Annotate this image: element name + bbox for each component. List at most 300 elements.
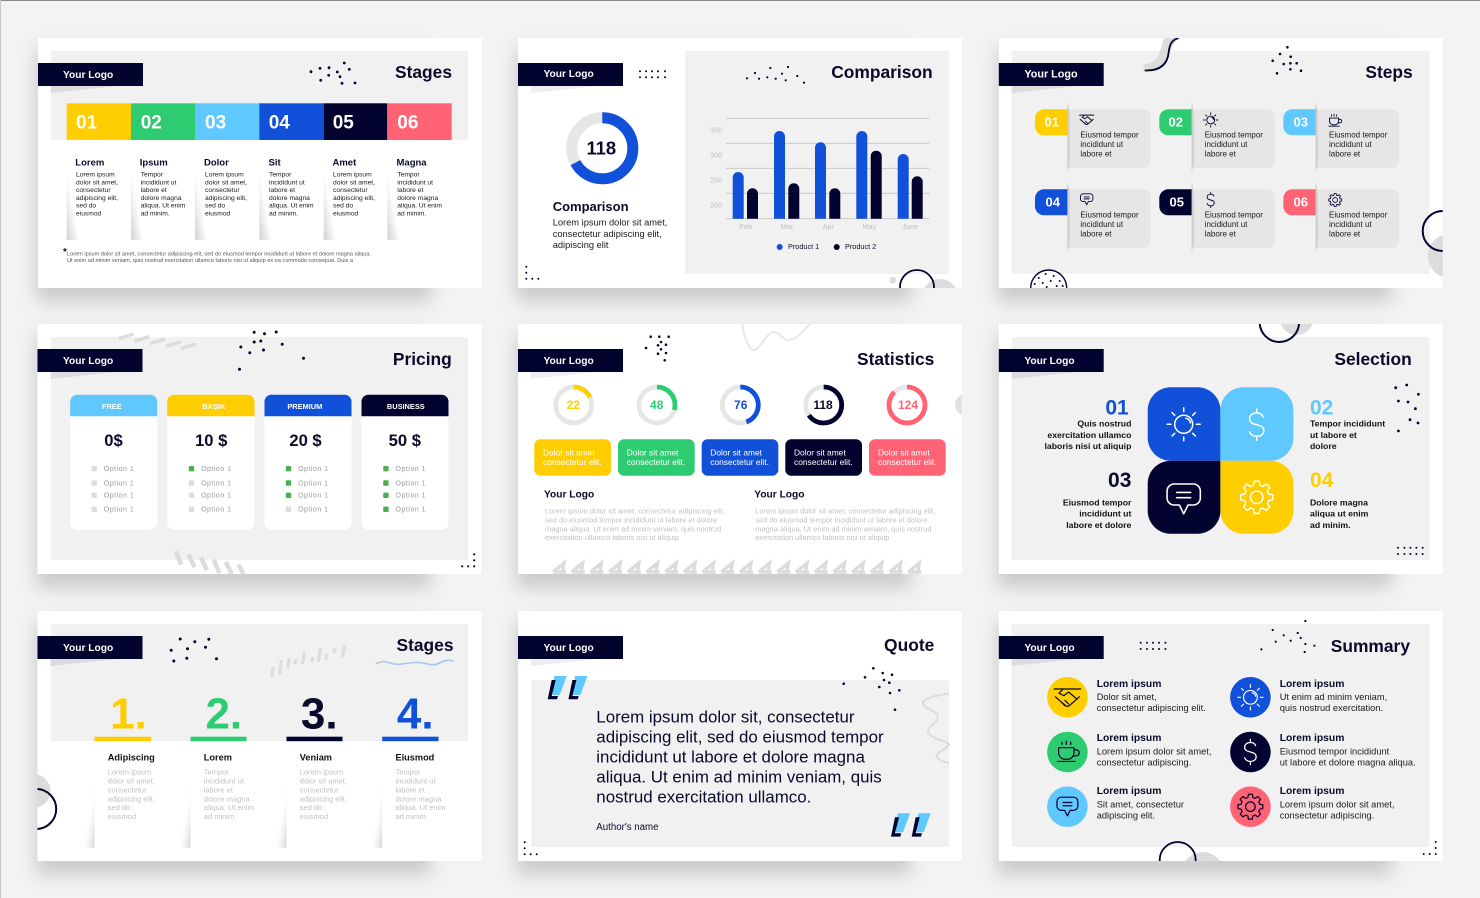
summary item: chat <box>1047 786 1184 827</box>
quote text: Lorem ipsum dolor sit, consectetur <box>596 707 855 726</box>
step 01: 01 <box>1044 115 1059 130</box>
pricing card: free: 0$ <box>104 431 123 450</box>
item 04 <box>1310 469 1369 530</box>
bar chart: 250 <box>710 176 722 185</box>
logo banner <box>999 349 1104 372</box>
stage 4: 4. <box>397 689 434 738</box>
step 06: incididunt ut <box>1329 220 1372 229</box>
text block right <box>754 490 935 542</box>
summary item: sun: Lorem ipsum <box>1280 679 1344 690</box>
step 03: incididunt ut <box>1329 140 1372 149</box>
pricing card: business: Option 1 <box>396 507 426 514</box>
item 01: Quis nostrud <box>1077 419 1131 429</box>
summary item: cup: Lorem ipsum <box>1097 733 1161 744</box>
summary item: gear: Lorem ipsum <box>1280 786 1344 797</box>
summary item: handshake: Lorem ipsum <box>1097 679 1161 690</box>
logo banner: Your Logo <box>544 69 594 80</box>
summary item: cup: consectetur adipiscing. <box>1097 757 1191 767</box>
panel: stages colour bars <box>38 38 482 288</box>
summary item: sun <box>1230 677 1387 718</box>
stage 4: Eiusmod <box>396 753 434 763</box>
stage 04: 04 <box>269 112 290 133</box>
stage 05: eiusmod <box>333 210 359 217</box>
label box: navy: Dolor sit amet <box>794 447 846 457</box>
stage 06: incididunt ut <box>397 179 433 186</box>
text block right: exercitation ullamco laboris nisi ut aliquip <box>755 533 889 542</box>
stage 1: Lorem ipsum <box>108 768 151 777</box>
stage 04: labore et <box>269 187 295 194</box>
stage 05: Lorem ipsum <box>333 172 372 179</box>
stage 03: Dolor <box>204 158 229 169</box>
pricing card: premium: Option 1 <box>298 466 329 473</box>
stage 01: eiusmod <box>76 210 102 217</box>
title with wave <box>376 635 454 665</box>
text block left: exercitation ullamco laboris nisi ut aliquip <box>545 533 679 542</box>
stage 01 <box>67 103 131 240</box>
petal: dollar <box>1220 387 1293 461</box>
summary item: gear: Lorem ipsum dolor sit amet, <box>1280 800 1394 810</box>
stage 01: adipiscing elit, <box>76 195 118 202</box>
pricing card: business: Option 1 <box>396 480 426 487</box>
pricing card: premium: PREMIUM <box>287 402 322 411</box>
bar chart: May <box>862 222 877 231</box>
summary item: handshake: consectetur adipiscing elit. <box>1097 703 1206 713</box>
step 06: labore et <box>1329 229 1361 238</box>
text block right: magna aliqua. Ut enim ad minim veniam, quis nostrud <box>755 524 932 533</box>
icon: closing quote marks <box>891 813 931 837</box>
item 01 <box>1045 397 1131 451</box>
stage 04: Sit <box>268 158 281 169</box>
step 03 <box>1283 102 1399 172</box>
stage 3: consectetur <box>300 785 339 794</box>
text block left: magna aliqua. Ut enim ad minim veniam, quis nostrud <box>545 524 721 533</box>
title with wave: Stages <box>396 635 454 655</box>
item 02: ut labore et <box>1310 430 1357 440</box>
panel: steps <box>998 38 1443 288</box>
item 04: 04 <box>1310 469 1334 492</box>
step 04: incididunt ut <box>1080 220 1124 229</box>
donut: 48 <box>639 387 675 423</box>
stage 1: Adipiscing <box>108 753 155 763</box>
bar chart: Feb <box>739 222 752 231</box>
donut: 76: 76 <box>734 398 748 412</box>
summary item: sun: Ut enim ad minim veniam, <box>1280 692 1387 702</box>
legend <box>776 244 876 250</box>
label box: green: Dolor sit amet <box>627 447 679 457</box>
pricing card: free: Option 1 <box>104 507 134 514</box>
footnote: * <box>63 247 67 258</box>
stage 3: Veniam <box>300 753 332 763</box>
footnote <box>63 248 371 263</box>
pricing card: business: Option 1 <box>396 466 426 473</box>
label box: blue: consectetur elit. <box>710 457 769 467</box>
text block right: Your Logo <box>754 490 804 500</box>
comparison text: consectetur adipiscing elit, <box>553 229 662 239</box>
item 03: incididunt ut <box>1079 509 1131 519</box>
label box: green <box>618 439 695 476</box>
stage 04: aliqua. Ut enim <box>269 203 314 210</box>
logo banner <box>999 63 1104 86</box>
title: Summary <box>1331 636 1410 656</box>
step 06: 06 <box>1293 195 1308 210</box>
icon: opening quote marks <box>548 676 587 699</box>
stage 4: ad minim. <box>396 812 428 821</box>
pricing card: premium: Option 1 <box>298 480 329 487</box>
logo banner: Your Logo <box>63 643 113 654</box>
stage 06: dolore magna <box>397 195 438 202</box>
stage 1 <box>70 689 155 848</box>
author: Author's name <box>596 822 658 833</box>
step 01: labore et <box>1080 149 1112 158</box>
panel: selection <box>999 301 1443 574</box>
stage 02: 02 <box>141 112 162 133</box>
label box: coral: Dolor sit amet <box>878 447 930 457</box>
bar chart: 200 <box>710 201 722 210</box>
label box: yellow: Dolor sit amet <box>543 447 595 457</box>
stage 02: incididunt ut <box>141 179 177 186</box>
step 02: 02 <box>1168 115 1183 130</box>
stage 3: Lorem ipsum <box>300 768 343 777</box>
logo banner <box>999 636 1104 659</box>
stage 05: Amet <box>332 158 357 169</box>
stage 2: Lorem <box>204 753 232 763</box>
pricing card: free: FREE <box>102 402 122 411</box>
pricing card: basik: Option 1 <box>201 480 232 487</box>
donut: 118 <box>572 118 633 179</box>
stage 3: adipiscing elit, <box>300 794 347 803</box>
step 04: 04 <box>1045 195 1061 210</box>
stage 03: Lorem ipsum <box>205 172 244 179</box>
donut: 22: 22 <box>567 398 580 412</box>
text block left: Your Logo <box>544 490 594 500</box>
item 02: 02 <box>1310 397 1333 420</box>
title: Pricing <box>393 349 452 369</box>
stage 3: dolor sit amet, <box>300 777 347 786</box>
stage 04: incididunt ut <box>269 179 305 186</box>
stage 06: aliqua. Ut enim <box>397 203 442 210</box>
footnote: Ut enim ad minim veniam, quis nostrud exercitation ullamco laboris nisi ut aliquip ex ea commodo consequat. Duis a <box>67 258 354 264</box>
item 04: ad minim. <box>1310 520 1351 530</box>
pricing card: free: Option 1 <box>104 466 134 473</box>
item 02: dolore <box>1310 441 1337 451</box>
pricing card: business: 50 $ <box>389 431 421 450</box>
summary item: handshake: Dolor sit amet, <box>1097 692 1157 702</box>
step 03: labore et <box>1329 149 1361 158</box>
summary item: cup: Lorem ipsum dolor sit amet, <box>1097 746 1211 756</box>
stage 06: labore et <box>397 187 423 194</box>
step 05: 05 <box>1169 195 1184 210</box>
donut: 48: 48 <box>650 398 664 412</box>
quote text: incididunt ut labore et dolore magna <box>596 747 865 766</box>
logo banner <box>38 63 143 86</box>
stage 03 <box>195 103 259 240</box>
donut: 118 <box>806 387 842 423</box>
pricing card: basik: BASIK <box>202 402 226 411</box>
step 05: labore et <box>1205 229 1237 238</box>
stage 03: adipiscing elit, <box>205 195 247 202</box>
pricing card: business <box>362 395 448 530</box>
item 04: aliqua ut enim <box>1310 509 1369 519</box>
donut: 118: 118 <box>586 137 616 158</box>
panel: numbered stages <box>16 611 481 861</box>
quote text: aliqua. Ut enim ad minim veniam, quis <box>596 767 882 786</box>
summary item: sun: quis nostrud exercitation. <box>1280 703 1383 713</box>
label box: yellow <box>534 439 611 476</box>
summary item: chat: Lorem ipsum <box>1097 786 1161 797</box>
summary item: chat: Sit amet, consectetur <box>1097 800 1184 810</box>
logo banner <box>38 349 142 372</box>
stage 03: sed do <box>205 203 225 210</box>
panel: comparison chart <box>518 38 962 315</box>
petal: chat <box>1148 461 1220 534</box>
logo banner: Your Logo <box>544 643 594 654</box>
pricing card: free: Option 1 <box>104 493 134 500</box>
donut: 22 <box>556 387 592 423</box>
stage 03: consectetur <box>205 187 240 194</box>
label box: yellow: consectetur elit. <box>543 457 602 467</box>
stage 03: dolor sit amet, <box>205 179 247 186</box>
stage 02: labore et <box>141 187 167 194</box>
bar chart: 350 <box>710 126 722 135</box>
summary item: dollar: Eiusmod tempor incididunt <box>1280 746 1390 756</box>
stage 3: eiusmod <box>300 812 328 821</box>
item 03: 03 <box>1108 469 1131 492</box>
stage 04: ad minim. <box>269 210 298 217</box>
step 05: Eiusmod tempor <box>1205 211 1263 220</box>
donut: 118: 118 <box>813 398 833 412</box>
stage 02: Tempor <box>141 172 164 179</box>
stage 06: ad minim. <box>397 210 426 217</box>
panel: summary <box>999 611 1443 894</box>
stage 03: 03 <box>205 112 226 133</box>
title: Comparison <box>831 62 933 82</box>
stage 1: eiusmod <box>108 812 136 821</box>
item 01: exercitation ullamco <box>1047 430 1131 440</box>
label box: navy <box>785 439 862 476</box>
logo banner: Your Logo <box>1024 356 1075 367</box>
stage 02: dolore magna <box>141 195 182 202</box>
stage 01: Lorem ipsum <box>76 172 115 179</box>
step 05: incididunt ut <box>1205 220 1248 229</box>
bar chart: 300 <box>710 151 722 160</box>
panel: pricing <box>38 324 482 574</box>
summary item: dollar <box>1230 732 1416 772</box>
stage 01: Lorem <box>75 158 104 169</box>
stage 4: dolore magna <box>396 794 442 803</box>
stage 4: Tempor <box>396 768 421 777</box>
step 05 <box>1159 182 1275 252</box>
legend: Product 2 <box>845 242 876 251</box>
petal: gear <box>1220 461 1293 534</box>
stage 06 <box>387 103 452 240</box>
stage 01: dolor sit amet, <box>76 179 118 186</box>
title: Selection <box>1334 349 1412 369</box>
stage 06: Magna <box>396 158 427 169</box>
item 02: Tempor incididunt <box>1310 419 1385 429</box>
stage 4: incididunt ut <box>396 777 436 786</box>
stage 2: ad minim. <box>204 812 236 821</box>
donut: 76 <box>722 387 758 423</box>
footnote: Lorem ipsum dolor sit amet, consectetur adipiscing elit, sed do eiusmod tempor incididunt ut labore et dolore magna aliqua. <box>67 252 371 258</box>
title: Steps <box>1365 62 1413 82</box>
stage 2: Tempor <box>204 768 229 777</box>
stage 05: 05 <box>333 112 354 133</box>
step 04: Eiusmod tempor <box>1080 211 1139 220</box>
donut: 124: 124 <box>898 398 918 412</box>
label box: navy: consectetur elit. <box>794 457 853 467</box>
stage 05: sed do <box>333 203 353 210</box>
item 03: labore et dolore <box>1066 520 1132 530</box>
step 01 <box>1035 102 1151 172</box>
step 02: Eiusmod tempor <box>1205 131 1263 140</box>
stage 2: labore et <box>204 785 234 794</box>
text block right: sed do eiusmod tempor incididunt ut labore et dolore <box>755 516 927 524</box>
title: Stages <box>395 62 452 82</box>
stage 2 <box>166 689 254 848</box>
petal: sun <box>1148 387 1220 461</box>
step 01: Eiusmod tempor <box>1080 131 1139 140</box>
comparison text: Lorem ipsum dolor sit amet, <box>553 218 667 228</box>
bar chart: Apr <box>823 222 835 231</box>
step 03: 03 <box>1293 115 1308 130</box>
pricing card: basik: Option 1 <box>201 493 232 500</box>
stage 3 <box>262 689 347 848</box>
step 04 <box>1035 182 1151 252</box>
item 03 <box>1063 469 1132 530</box>
step 02 <box>1159 102 1275 172</box>
title: Statistics <box>857 349 934 369</box>
stage 1: consectetur <box>108 785 147 794</box>
label box: coral: consectetur elit. <box>878 457 937 467</box>
step 01: incididunt ut <box>1080 140 1124 149</box>
stage 06: Tempor <box>397 172 420 179</box>
stage 02 <box>131 103 195 240</box>
logo banner: Your Logo <box>544 356 594 367</box>
donut: 124 <box>889 387 925 423</box>
pricing card: basik <box>167 395 254 530</box>
stage 06: 06 <box>397 112 418 133</box>
comparison text: adipiscing elit <box>553 240 609 250</box>
pricing card: basik: 10 $ <box>195 431 227 450</box>
stage 05: consectetur <box>333 187 368 194</box>
stage 01: consectetur <box>76 187 111 194</box>
stage 05 <box>324 103 387 240</box>
stage 03: eiusmod <box>205 210 231 217</box>
item 03: Eiusmod tempor <box>1063 497 1132 507</box>
summary item: handshake <box>1047 677 1206 718</box>
step 06 <box>1283 182 1399 252</box>
pricing card: basik: Option 1 <box>201 466 232 473</box>
stage 2: incididunt ut <box>204 777 245 786</box>
panel: quote <box>518 611 962 861</box>
stage 02: ad minim. <box>141 210 170 217</box>
stage 2: 2. <box>205 689 242 738</box>
stage 01: sed do <box>76 203 96 210</box>
bar chart: Mar <box>781 222 794 231</box>
stage 4: labore et <box>396 785 426 794</box>
quote text: adipiscing elit, sed do eiusmod tempor <box>596 727 884 746</box>
stage 2: aliqua. Ut enim <box>204 803 254 812</box>
stage 05: adipiscing elit, <box>333 195 375 202</box>
quote text: nostrud exercitation ullamco. <box>596 787 811 806</box>
summary item: dollar: ut labore et dolore magna aliqua. <box>1280 757 1416 767</box>
logo banner: Your Logo <box>63 356 113 367</box>
pricing card: business: BUSINESS <box>387 402 425 411</box>
title: Quote <box>884 635 935 655</box>
text block left <box>544 490 725 542</box>
summary item: dollar: Lorem ipsum <box>1280 733 1344 744</box>
stage 2: dolore magna <box>204 794 250 803</box>
text block left: Lorem ipsum dolor sit amet, consectetur adipiscing elit, <box>545 507 725 516</box>
comparison text: Comparison <box>553 199 629 214</box>
summary item: cup <box>1047 732 1211 772</box>
summary item: gear: consectetur adipiscing. <box>1280 811 1374 821</box>
item 04: Dolore magna <box>1310 497 1368 507</box>
logo banner <box>518 349 623 372</box>
logo banner: Your Logo <box>1024 643 1075 654</box>
label box: blue: Dolor sit amet <box>710 447 763 457</box>
logo banner <box>38 636 142 659</box>
label box: green: consectetur elit. <box>627 457 685 467</box>
item 01: laboris nisi ut aliquip <box>1045 441 1131 451</box>
step 06: Eiusmod tempor <box>1329 211 1388 220</box>
step 03: Eiusmod tempor <box>1329 131 1388 140</box>
stage 01: 01 <box>76 112 98 133</box>
panel: statistics <box>518 324 977 575</box>
logo banner <box>518 63 623 86</box>
label box: blue <box>702 439 778 476</box>
summary item: gear <box>1230 786 1394 827</box>
stage 05: dolor sit amet, <box>333 179 375 186</box>
item 01: 01 <box>1105 397 1129 420</box>
stage 04: Tempor <box>269 172 292 179</box>
stage 02: aliqua. Ut enim <box>141 203 186 210</box>
item 02 <box>1310 397 1385 451</box>
pricing card: premium <box>264 395 352 530</box>
comparison text <box>553 199 667 250</box>
step 04: labore et <box>1080 229 1112 238</box>
stage 4 <box>358 689 446 848</box>
logo banner: Your Logo <box>63 70 113 81</box>
stage 02: Ipsum <box>140 158 168 169</box>
stage 3: sed do <box>300 803 322 812</box>
stage 1: 1. <box>110 689 147 738</box>
step 02: labore et <box>1205 149 1237 158</box>
stage 1: adipiscing elit, <box>108 794 155 803</box>
pricing card: free: Option 1 <box>104 480 134 487</box>
label box: coral <box>869 439 946 476</box>
step 02: incididunt ut <box>1205 140 1248 149</box>
bar chart: June <box>902 222 918 231</box>
stage 3: 3. <box>301 689 338 738</box>
legend: Product 1 <box>788 242 819 251</box>
text block left: sed do eiusmod tempor incididunt ut labore et dolore <box>545 516 717 524</box>
pricing card: premium: 20 $ <box>289 431 322 450</box>
logo banner <box>518 636 623 659</box>
bar chart <box>710 118 929 231</box>
pricing card: premium: Option 1 <box>298 507 329 514</box>
pricing card: premium: Option 1 <box>298 493 329 500</box>
stage 04 <box>259 103 324 240</box>
pricing card: basik: Option 1 <box>201 507 232 514</box>
text block right: Lorem ipsum dolor sit amet, consectetur adipiscing elit, <box>755 507 935 516</box>
summary item: chat: adipiscing elit. <box>1097 811 1155 821</box>
stage 1: dolor sit amet, <box>108 777 155 786</box>
stage 1: sed do <box>108 803 130 812</box>
logo banner: Your Logo <box>1024 68 1078 80</box>
pricing card: free <box>70 395 157 530</box>
stage 04: dolore magna <box>269 195 310 202</box>
